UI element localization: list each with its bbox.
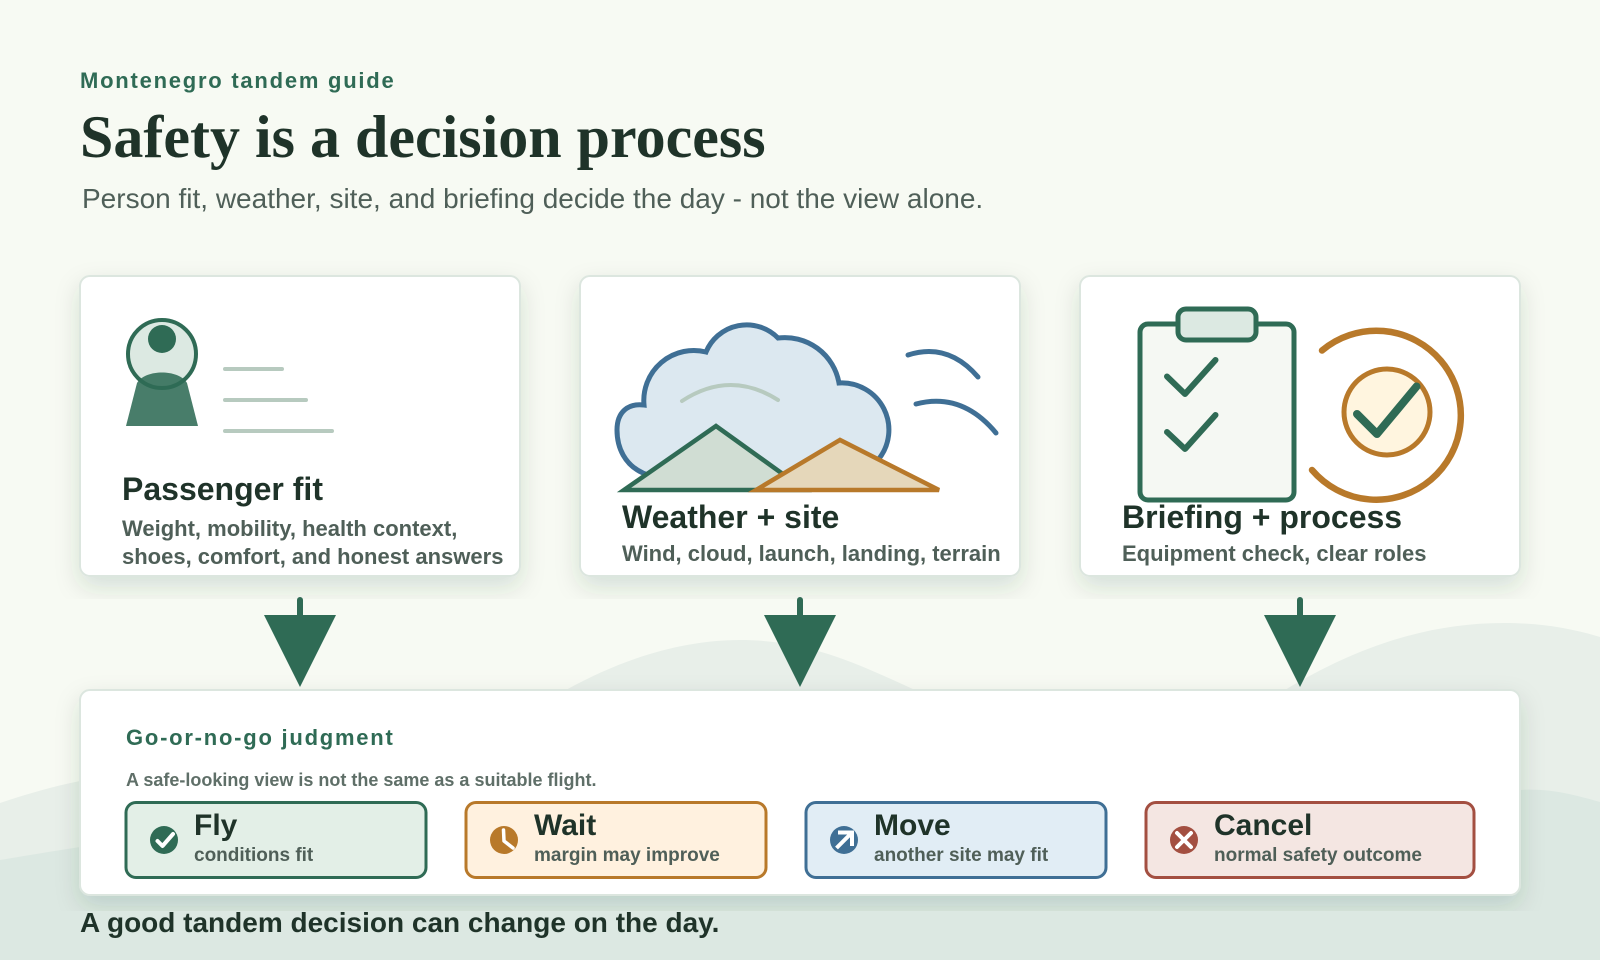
fly label: Fly <box>194 809 238 842</box>
option: move <box>806 802 1106 878</box>
arrow: weather to judgment <box>764 597 836 687</box>
description: briefing and process: Equipment check, clear roles <box>1122 541 1426 566</box>
fly note: conditions fit <box>194 845 314 866</box>
arrow: briefing to judgment <box>1264 597 1336 687</box>
panel: weather and site <box>580 276 1020 576</box>
heading: briefing and process: Briefing + process <box>1122 499 1402 535</box>
eyebrow: Montenegro tandem guide <box>80 68 395 93</box>
panel heading: Go-or-no-go judgment <box>126 725 395 750</box>
background hill: front ridge <box>0 790 1600 960</box>
background hill: back ridge <box>0 623 1600 960</box>
icon: process ring with check <box>1312 331 1461 500</box>
wait label: Wait <box>534 809 596 842</box>
move label: Move <box>874 809 951 842</box>
title: Safety is a decision process <box>80 104 766 170</box>
wait note: margin may improve <box>534 845 720 866</box>
description: passenger fit: Weight, mobility, health context, <box>122 516 457 541</box>
heading: passenger fit: Passenger fit <box>122 471 323 507</box>
icon: clock <box>490 826 518 854</box>
icon: clipboard <box>1140 309 1294 500</box>
icon: mountains <box>624 426 939 490</box>
header <box>80 68 983 214</box>
icon: cloud <box>617 325 889 480</box>
panel: briefing and process <box>1080 276 1520 576</box>
footer takeaway: A good tandem decision can change on the day. <box>80 907 719 938</box>
icon: check <box>150 826 178 854</box>
panel note: A safe-looking view is not the same as a suitable flight. <box>126 770 596 790</box>
arrow: passenger fit to judgment <box>264 597 336 687</box>
icon: passenger <box>126 320 198 426</box>
panel: passenger fit <box>80 276 520 576</box>
heading: weather and site: Weather + site <box>622 499 839 535</box>
cancel label: Cancel <box>1214 809 1312 842</box>
icon: cross <box>1170 826 1198 854</box>
description: weather and site: Wind, cloud, launch, landing, terrain <box>622 541 1001 566</box>
icon: arrow <box>830 826 858 854</box>
option: cancel <box>1146 802 1474 878</box>
description: passenger fit: shoes, comfort, and honest answers <box>122 544 503 569</box>
option: fly <box>126 802 426 878</box>
option: wait <box>466 802 766 878</box>
icon: wind <box>908 351 996 433</box>
cancel note: normal safety outcome <box>1214 845 1422 866</box>
subtitle: Person fit, weather, site, and briefing decide the day - not the view alone. <box>82 183 983 214</box>
move note: another site may fit <box>874 845 1049 866</box>
panel: go-or-no-go judgment <box>80 690 1520 895</box>
icon: text lines <box>225 369 332 431</box>
